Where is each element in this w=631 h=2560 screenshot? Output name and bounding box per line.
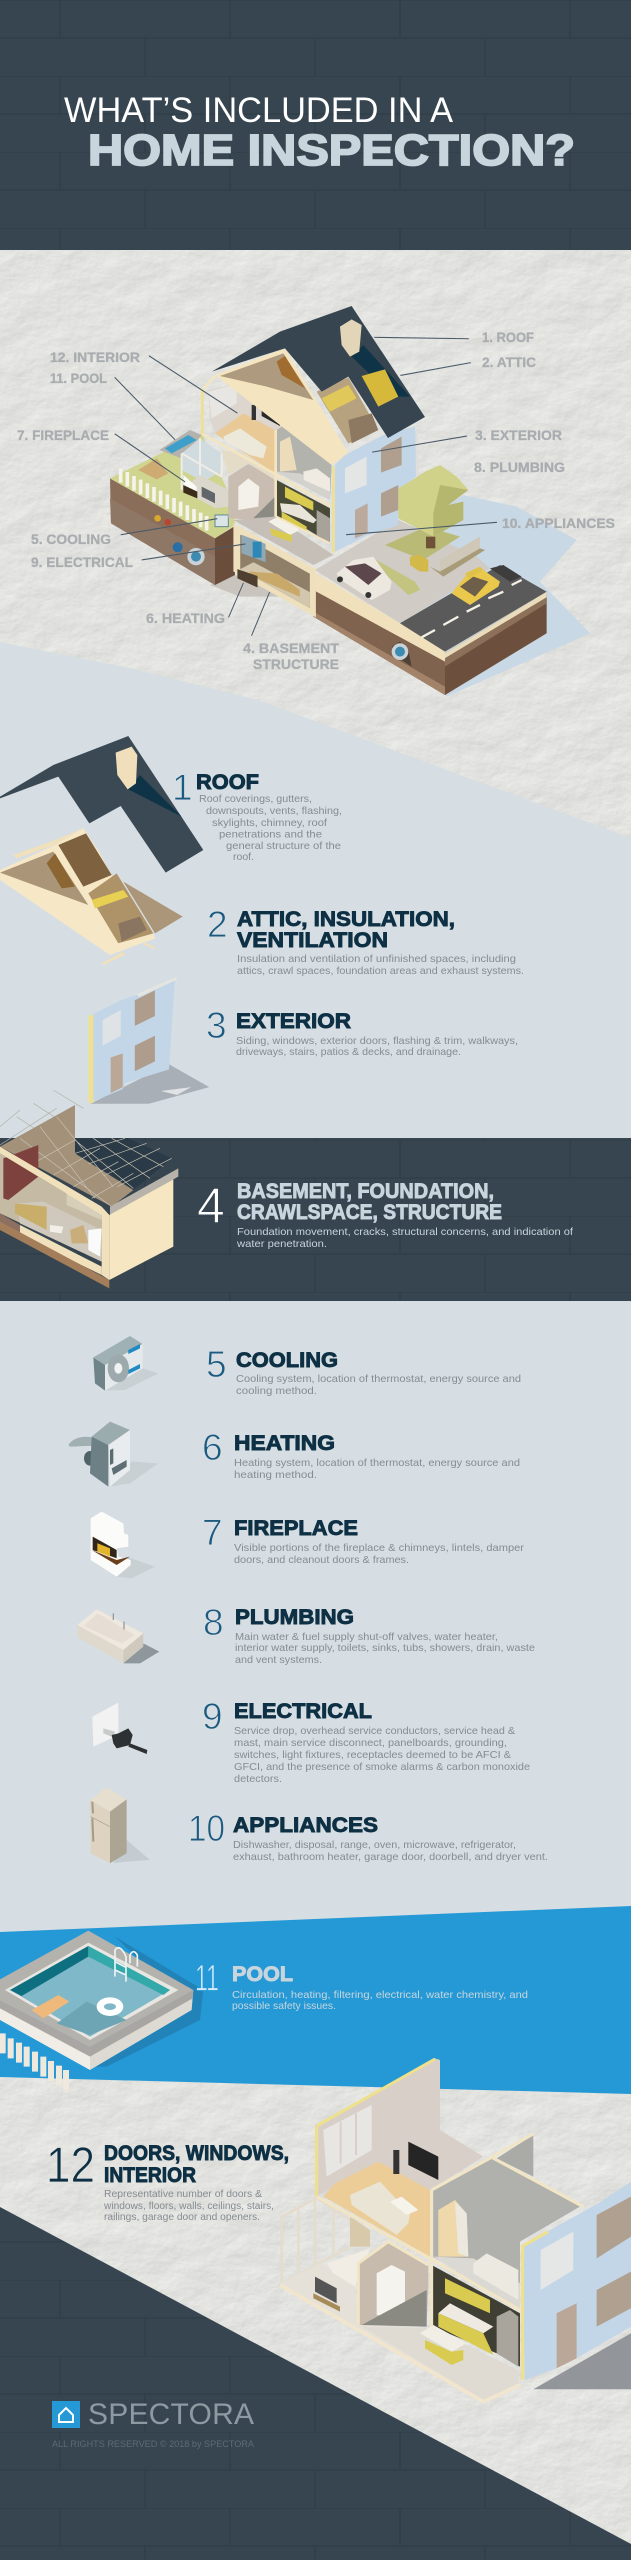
section 4: basement: Foundation movement, cracks, structural concerns, and indication of: [237, 1226, 573, 1238]
section 12: doors, windows, interior: 12: [46, 2137, 95, 2193]
section 3: exterior: Siding, windows, exterior doors, flashing & trim, walkways,: [236, 1035, 518, 1047]
section 4: basement: water penetration.: [236, 1238, 327, 1250]
section 4: basement: BASEMENT, FOUNDATION,: [237, 1180, 494, 1203]
callout labels and leader lines: 8. PLUMBING: [474, 459, 565, 475]
section 5: cooling: 5: [206, 1344, 227, 1385]
section 1: roof: Roof coverings, gutters,: [199, 793, 312, 805]
section 11: pool: possible safety issues.: [232, 2000, 336, 2012]
section 9: electrical: detectors.: [234, 1773, 282, 1785]
section 10: appliances: exhaust, bathroom heater, garage door, doorbell, and dryer vent.: [233, 1851, 548, 1863]
section 12: doors, windows, interior: railings, garage door and openers.: [104, 2211, 260, 2223]
section 1: roof: general structure of the: [226, 840, 341, 852]
section 10: appliances: Dishwasher, disposal, range, oven, microwave, refrigerator,: [233, 1839, 516, 1851]
section 8: plumbing: Main water & fuel supply shut-off valves, water heater,: [235, 1631, 498, 1643]
icon: fireplace: [91, 1512, 155, 1578]
section 9: electrical: GFCI, and the presence of smoke alarms & carbon monoxide: [234, 1761, 530, 1773]
callout labels and leader lines: 2. ATTIC: [482, 354, 536, 370]
roof: [212, 306, 425, 438]
light panel: sections 1 to 3: [0, 642, 631, 1140]
hero illustration: cutaway house: [110, 306, 590, 697]
section 2: attic: 2: [207, 904, 228, 945]
callout labels and leader lines: 1. ROOF: [482, 329, 534, 345]
section 9: electrical: [202, 1696, 530, 1785]
section 3: exterior: [206, 1005, 518, 1058]
section 5: cooling: [206, 1344, 521, 1397]
section 2: attic: ATTIC, INSULATION,: [237, 908, 455, 931]
callout labels and leader lines: 12. INTERIOR: [50, 349, 140, 365]
callout labels and leader lines: 5. COOLING: [31, 531, 111, 547]
dark header band: [0, 0, 631, 250]
section 7: fireplace: [202, 1512, 525, 1566]
section 6: heating: heating method.: [234, 1469, 317, 1481]
panel: basement band: [0, 1138, 631, 1301]
icon: bathtub: [77, 1609, 159, 1663]
title: HOME INSPECTION?: [88, 126, 575, 175]
ground, driveway and road: [313, 495, 590, 697]
section 12: doors, windows, interior: windows, floors, walls, ceilings, stairs,: [103, 2200, 274, 2212]
section 2: attic: Insulation and ventilation of unfinished spaces, including: [237, 953, 516, 965]
plaster wall: top: [0, 250, 631, 850]
callout labels and leader lines: 9. ELECTRICAL: [31, 554, 133, 570]
section 12: doors, windows, interior: [46, 2137, 289, 2223]
section 9: electrical: 9: [202, 1696, 223, 1737]
section 9: electrical: Service drop, overhead service conductors, service head &: [234, 1725, 515, 1737]
section 11: pool: Circulation, heating, filtering, electrical, water chemistry, and: [232, 1989, 528, 2001]
section 8: plumbing: interior water supply, toilets, sinks, tubs, showers, drain, waste: [235, 1642, 535, 1654]
section 4: basement: CRAWLSPACE, STRUCTURE: [237, 1201, 502, 1224]
section 2: attic: VENTILATION: [237, 929, 388, 952]
section 7: fireplace: FIREPLACE: [234, 1517, 358, 1540]
callout labels and leader lines: 10. APPLIANCES: [502, 515, 615, 531]
section 11: pool: POOL: [232, 1963, 293, 1986]
rooms and attic: [202, 348, 378, 565]
section 12: doors, windows, interior: INTERIOR: [104, 2164, 196, 2187]
section 1: roof: ROOF: [196, 771, 259, 794]
section 6: heating: [202, 1427, 520, 1481]
callout labels and leader lines: 3. EXTERIOR: [475, 427, 562, 443]
section 3: exterior: 3: [206, 1005, 227, 1046]
brand name: SPECTORA: [88, 2398, 254, 2431]
section 4: basement: [197, 1178, 573, 1250]
section 1: roof: downspouts, vents, flashing,: [206, 805, 342, 817]
panel: pool blue band: [0, 1906, 631, 2094]
callout labels and leader lines: 11. POOL: [50, 370, 107, 386]
title: WHAT’S INCLUDED IN A: [64, 91, 454, 130]
section 12: doors, windows, interior: Representative number of doors &: [104, 2188, 262, 2200]
section 8: plumbing: [203, 1602, 535, 1666]
section 1: roof: skylights, chimney, roof: [212, 817, 327, 829]
section 7: fireplace: Visible portions of the fireplace & chimneys, lintels, damper: [234, 1542, 525, 1554]
section 10: appliances: [188, 1808, 548, 1863]
section 3: exterior: driveways, stairs, patios & decks, and drainage.: [236, 1046, 461, 1058]
illustration: basement: [0, 1090, 178, 1288]
section 9: electrical: ELECTRICAL: [234, 1700, 372, 1723]
section 11: pool: [195, 1958, 528, 2012]
section 8: plumbing: 8: [203, 1602, 224, 1643]
section 1: roof: roof.: [233, 851, 254, 863]
callout labels and leader lines: [17, 329, 615, 672]
section 10: appliances: 10: [188, 1808, 225, 1849]
section 2: attic: attics, crawl spaces, foundation areas and exhaust systems.: [237, 965, 524, 977]
section 11: pool: 11: [195, 1958, 219, 1998]
section 8: plumbing: PLUMBING: [235, 1606, 354, 1629]
section 7: fireplace: 7: [202, 1512, 223, 1553]
plaster wall: bottom: [0, 2070, 631, 2560]
section 1: roof: penetrations and the: [219, 828, 322, 840]
illustration: pool: [0, 1931, 203, 2091]
dark footer triangle: [0, 2207, 631, 2560]
callout labels and leader lines: STRUCTURE: [253, 656, 339, 672]
section 9: electrical: switches, light fixtures, receptacles deemed to be AFCI &: [234, 1749, 511, 1761]
section 4: basement: 4: [197, 1178, 225, 1234]
icon: Spectora logo: [52, 2401, 80, 2428]
illustration: exterior wall: [89, 976, 209, 1104]
illustration: interior cutaway: [280, 2058, 631, 2403]
section 6: heating: HEATING: [234, 1432, 335, 1455]
copyright: ALL RIGHTS RESERVED © 2018 by SPECTORA: [52, 2439, 254, 2449]
section 1: roof: [172, 767, 342, 863]
section 3: exterior: EXTERIOR: [236, 1010, 351, 1033]
section 6: heating: 6: [202, 1427, 223, 1468]
callout labels and leader lines: 4. BASEMENT: [243, 640, 339, 656]
section 8: plumbing: and vent systems.: [235, 1654, 322, 1666]
section 6: heating: Heating system, location of thermostat, energy source and: [234, 1457, 520, 1469]
icon: plug and socket: [92, 1703, 147, 1754]
basement cutaway: [233, 523, 316, 617]
soil block and garden: [110, 430, 313, 597]
section 12: doors, windows, interior: DOORS, WINDOWS,: [104, 2142, 289, 2165]
section 7: fireplace: doors, and cleanout doors & frames.: [234, 1554, 409, 1566]
callout labels and leader lines: 7. FIREPLACE: [17, 427, 109, 443]
section 5: cooling: Cooling system, location of thermostat, energy source and: [236, 1373, 521, 1385]
icon: furnace: [68, 1422, 158, 1487]
callout labels and leader lines: 6. HEATING: [146, 610, 225, 626]
section 10: appliances: APPLIANCES: [233, 1814, 378, 1837]
section 5: cooling: COOLING: [236, 1349, 338, 1372]
illustration: roof and attic: [0, 736, 203, 965]
icon: air conditioner: [93, 1336, 158, 1391]
section 1: roof: 1: [172, 767, 193, 808]
exterior wall, trees and cars: [333, 427, 500, 605]
section 2: attic: [207, 904, 524, 977]
section 9: electrical: mast, main service disconnect, panelboards, grounding,: [234, 1737, 507, 1749]
section 5: cooling: cooling method.: [236, 1385, 317, 1397]
icon: refrigerator: [90, 1787, 150, 1863]
title: [64, 91, 575, 175]
